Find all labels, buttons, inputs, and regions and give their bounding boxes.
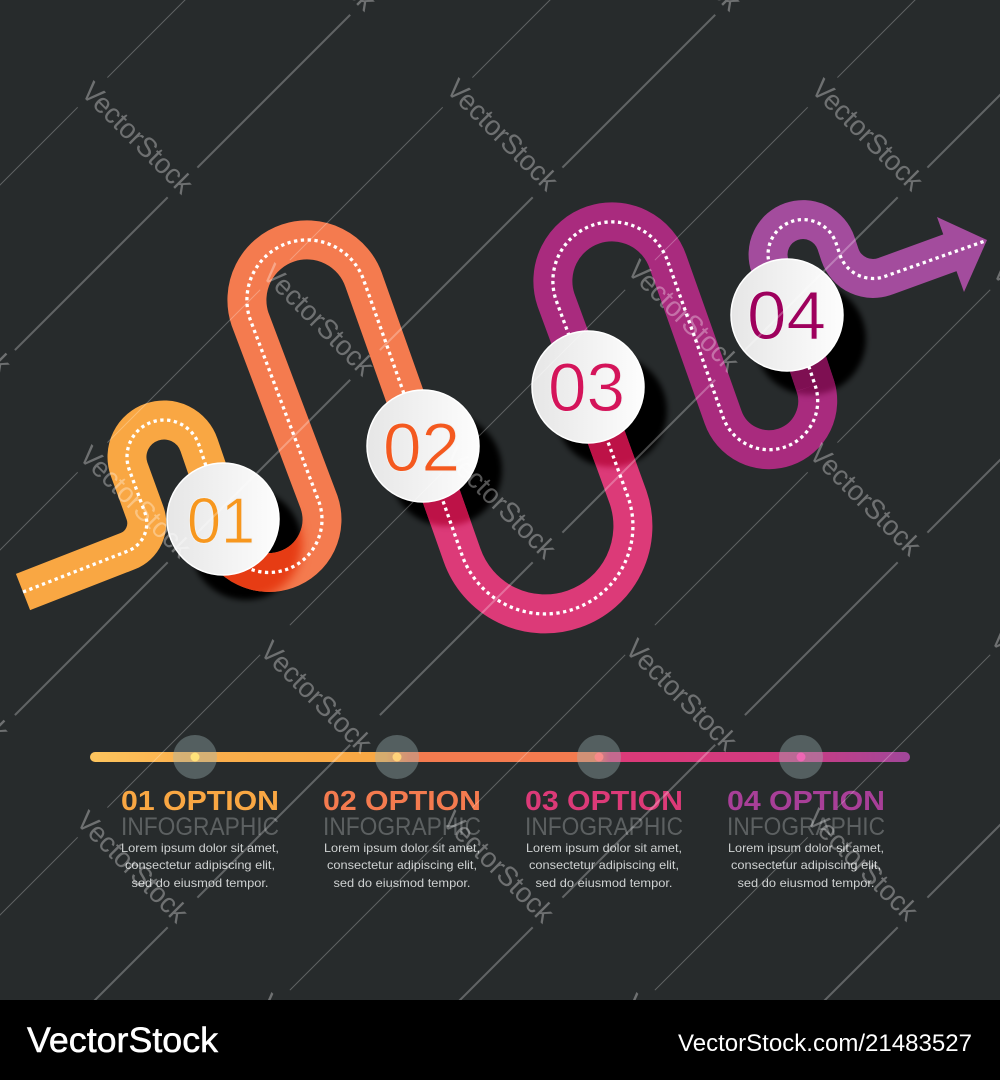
- step badge 04: 04: [747, 277, 826, 354]
- step badge 04: [731, 259, 843, 371]
- timeline marker 1: [173, 735, 217, 779]
- option 01 text: consectetur adipiscing elit,: [125, 858, 275, 872]
- road segment 4 with arrow: [768, 217, 987, 300]
- road segment 2: [219, 240, 425, 572]
- option 04 text: sed do eiusmod tempor.: [738, 876, 874, 890]
- watermarks: VectorStock: [254, 635, 379, 759]
- road segment 1: [23, 420, 222, 592]
- option 01 text: [121, 785, 279, 890]
- timeline bar: [90, 752, 910, 762]
- step badge 01: [167, 463, 279, 575]
- timeline marker 4: [779, 735, 823, 779]
- watermarks: VectorStock: [436, 805, 561, 929]
- option 04 text: 04 OPTION: [727, 785, 885, 816]
- option 01 text: INFOGRAPHIC: [121, 813, 279, 841]
- option 03 text: sed do eiusmod tempor.: [536, 876, 672, 890]
- watermarks: VectorStock: [73, 440, 198, 564]
- option 01 text: sed do eiusmod tempor.: [132, 876, 268, 890]
- watermarks: VectorStock: [440, 73, 565, 197]
- footer url text: VectorStock.com/21483527: [678, 1030, 972, 1057]
- timeline: [90, 735, 910, 779]
- option 03 text: consectetur adipiscing elit,: [529, 858, 679, 872]
- option 02 text: sed do eiusmod tempor.: [334, 876, 470, 890]
- option 02 text: INFOGRAPHIC: [323, 813, 481, 841]
- watermarks: VectorStock: [256, 258, 381, 382]
- step badge 03: [532, 331, 644, 443]
- option 02 text: consectetur adipiscing elit,: [327, 858, 477, 872]
- step badge 02: [367, 390, 479, 502]
- option 04 text: Lorem ipsum dolor sit amet,: [728, 841, 884, 855]
- option 02 text: [323, 785, 481, 890]
- watermarks: VectorStock: [621, 254, 746, 378]
- option 03 text: [525, 785, 683, 890]
- road segment 3 to 4: [553, 222, 818, 450]
- step badge 01: 01: [187, 484, 255, 557]
- watermarks: VectorStock: [619, 633, 744, 757]
- option 02 text: 02 OPTION: [323, 785, 481, 816]
- option 04 text: INFOGRAPHIC: [727, 813, 885, 841]
- road segment 3: [425, 387, 633, 614]
- option 02 text: Lorem ipsum dolor sit amet,: [324, 841, 480, 855]
- circle shadows: [190, 283, 866, 600]
- watermarks: VectorStock: [805, 73, 930, 197]
- option 03 text: Lorem ipsum dolor sit amet,: [526, 841, 682, 855]
- option 01 text: 01 OPTION: [121, 785, 279, 816]
- watermarks: VectorStock: [438, 441, 563, 565]
- option 04 text: consectetur adipiscing elit,: [731, 858, 881, 872]
- timeline marker 3: [577, 735, 621, 779]
- footer bar: [0, 1000, 1000, 1080]
- watermarks: VectorStock: [70, 805, 195, 929]
- winding road: [23, 217, 987, 614]
- footer logo text: VectorStock: [27, 1021, 219, 1060]
- watermarks: VectorStock: [800, 803, 925, 927]
- option 01 text: Lorem ipsum dolor sit amet,: [121, 841, 279, 855]
- step badge 02: 02: [383, 409, 460, 486]
- option 04 text: [727, 785, 885, 890]
- watermarks: VectorStock: [75, 76, 200, 200]
- option 03 text: INFOGRAPHIC: [525, 813, 683, 841]
- timeline marker 2: [375, 735, 419, 779]
- option 03 text: 03 OPTION: [525, 785, 683, 816]
- watermarks: VectorStock: [803, 438, 928, 562]
- step badge 03: 03: [548, 349, 625, 426]
